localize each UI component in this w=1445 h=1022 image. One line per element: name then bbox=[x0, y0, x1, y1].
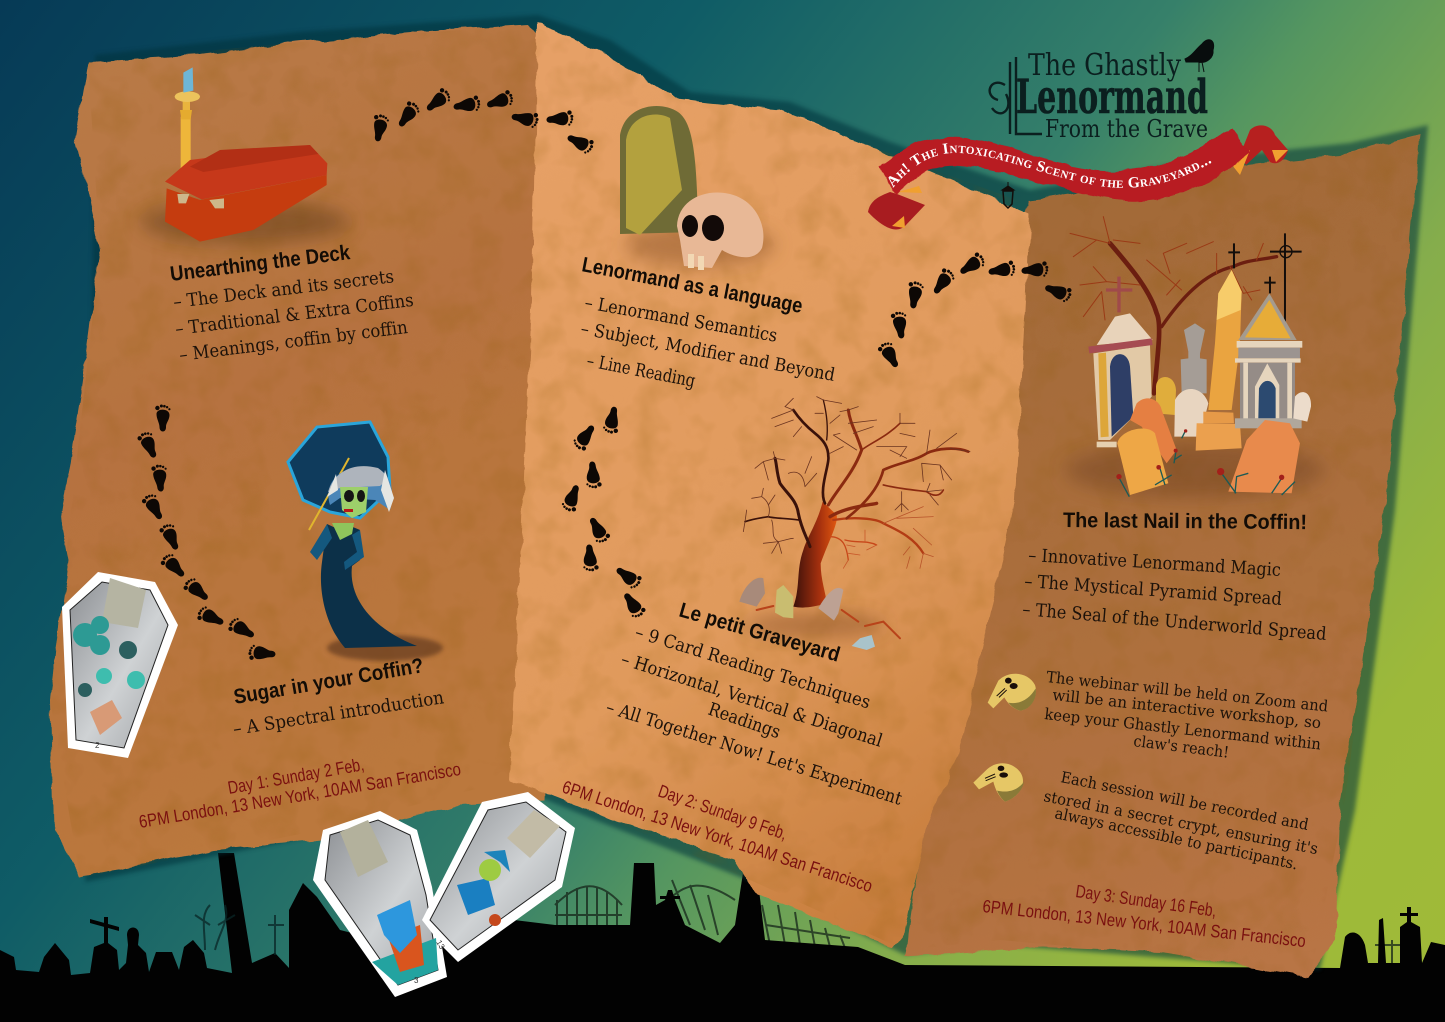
iron fences behind the graves bbox=[555, 880, 1400, 963]
illustration: mausoleums and graves bbox=[1070, 217, 1311, 497]
icon: skull two bbox=[973, 763, 1024, 802]
text: section 1 Unearthing the Deck: – The Deck and its secrets bbox=[172, 266, 395, 313]
head bbox=[340, 487, 368, 518]
ribbon body bbox=[878, 128, 1250, 201]
orange headstone back bbox=[1130, 398, 1177, 463]
ribbon right curl bbox=[1240, 125, 1288, 165]
red right branches bbox=[828, 410, 968, 560]
text: day 2 schedule: Day 2: Sunday 9 Feb, bbox=[656, 781, 790, 844]
logo: The Ghastly Lenormand From the Grave: The Ghastly bbox=[1028, 48, 1181, 83]
icon: lantern bbox=[1002, 182, 1014, 208]
text: day 1 schedule: 6PM London, 13 New York, 10AM San Francisco bbox=[137, 759, 462, 832]
card: coffin card 13 bbox=[422, 792, 575, 962]
left mausoleum bbox=[1088, 277, 1153, 447]
text: day 3 schedule: Day 3: Sunday 16 Feb, bbox=[1074, 881, 1218, 921]
text: section 2 Sugar in your Coffin bbox=[232, 654, 446, 740]
text: section 1 Unearthing the Deck bbox=[169, 241, 415, 366]
text: section 5 The last Nail in the Coffin: The last Nail in the Coffin! bbox=[1063, 509, 1307, 534]
text: webinar note: The webinar will be held on Zoom and bbox=[1046, 668, 1329, 716]
icon: skull one bbox=[988, 674, 1036, 711]
banner: red ribbon bbox=[868, 125, 1288, 230]
text: section 4 Le petit Graveyard: Le petit Graveyard bbox=[677, 599, 843, 667]
text: section 1 Unearthing the Deck: Unearthing the Deck bbox=[169, 241, 352, 286]
orange headstone front right bbox=[1228, 420, 1300, 493]
parasol bbox=[288, 422, 390, 518]
card: clover coffin card 2: 2 bbox=[95, 741, 100, 750]
tombstone bbox=[620, 106, 698, 234]
illustration: bare tree with graves bbox=[739, 397, 970, 650]
graveyard tree bbox=[1070, 217, 1277, 393]
text: section 4 Le petit Graveyard: Readings bbox=[705, 699, 783, 743]
text: section 3 Lenormand as a language: – Line Reading bbox=[585, 350, 697, 392]
text: section 3 Lenormand as a language: Lenormand as a language bbox=[580, 253, 804, 318]
graveyard silhouette bbox=[0, 853, 1445, 1022]
card: clover coffin card 2 bbox=[62, 572, 178, 758]
logo: The Ghastly Lenormand From the Grave: From the Grave bbox=[1045, 115, 1208, 143]
skeletal hands bbox=[177, 194, 224, 208]
crosses bbox=[1228, 233, 1302, 323]
trunk bbox=[793, 502, 837, 608]
text: section 4 Le petit Graveyard: – 9 Card Reading Techniques bbox=[633, 622, 873, 713]
text: recording note bbox=[1042, 768, 1320, 873]
right mausoleum bbox=[1235, 293, 1311, 428]
card: coffin card 3: 3 bbox=[414, 976, 419, 985]
logo: The Ghastly Lenormand From the Grave bbox=[990, 40, 1214, 143]
text: webinar note: keep your Ghastly Lenormand within bbox=[1044, 705, 1322, 753]
obelisk bbox=[1196, 270, 1242, 451]
text: recording note: always accessible to participants. bbox=[1053, 804, 1299, 873]
small gold headstone bbox=[1156, 377, 1176, 415]
text: day 2 schedule: 6PM London, 13 New York, 10AM San Francisco bbox=[560, 777, 875, 896]
footprints: middle trail bbox=[560, 405, 647, 620]
icon: ornamental L swirl bbox=[990, 57, 1042, 134]
dark left branches bbox=[745, 400, 828, 547]
text: section 4 Le petit Graveyard: – All Together Now! Let's Experiment bbox=[603, 697, 905, 810]
skull bbox=[677, 192, 763, 270]
twigs bbox=[743, 397, 970, 568]
text: section 4 Le petit Graveyard: – Horizontal, Vertical & Diagonal bbox=[618, 649, 885, 752]
footprints: left trail bbox=[136, 404, 276, 662]
dress bbox=[321, 524, 417, 648]
text: recording note: stored in a secret crypt, ensuring it's bbox=[1042, 787, 1320, 858]
text: section 5 The last Nail in the Coffin: – The Seal of the Underworld Spread bbox=[1022, 599, 1327, 645]
banner: red ribbon: Ah! The Intoxicating Scent of the Graveyard... bbox=[888, 143, 1212, 188]
white headstone bbox=[1174, 389, 1208, 437]
text: section 1 Unearthing the Deck: – Meanings, coffin by coffin bbox=[178, 317, 409, 366]
panel: left bbox=[50, 25, 570, 876]
text: recording note: Each session will be recorded and bbox=[1059, 768, 1310, 834]
shadow under coffin bbox=[140, 200, 350, 244]
text: webinar note: claw's reach! bbox=[1133, 732, 1230, 762]
text: section 4 Le petit Graveyard bbox=[603, 599, 905, 810]
text: day 3 schedule bbox=[982, 881, 1307, 951]
text: section 5 The last Nail in the Coffin: – Innovative Lenormand Magic bbox=[1028, 545, 1282, 581]
ribbon left curl bbox=[868, 192, 925, 229]
gravestones bbox=[739, 578, 875, 650]
urn monument bbox=[1181, 323, 1207, 393]
card: coffin card 13: 13 bbox=[434, 938, 447, 951]
coffin lid plate bbox=[190, 145, 318, 172]
illustration: coffin and candle bbox=[165, 67, 327, 242]
shadow under tree bbox=[745, 613, 885, 637]
coffin lid bbox=[165, 145, 327, 199]
logo: The Ghastly Lenormand From the Grave: Lenormand bbox=[1016, 70, 1208, 125]
hat and feathers bbox=[327, 466, 394, 512]
text: section 3 Lenormand as a language: – Subject, Modifier and Beyond bbox=[579, 318, 837, 386]
flowers bbox=[1116, 429, 1295, 497]
panel: right bbox=[905, 135, 1420, 977]
panel: middle bbox=[510, 22, 1030, 948]
bare chest bbox=[332, 523, 354, 540]
text: section 2 Sugar in your Coffin: – A Spectral introduction bbox=[232, 687, 446, 740]
orange headstone front left bbox=[1117, 428, 1168, 495]
card: coffin card 3 bbox=[313, 811, 447, 997]
text: section 5 The last Nail in the Coffin bbox=[1022, 509, 1327, 645]
illustration: skeleton lady with parasol bbox=[288, 422, 443, 661]
ribbon text bbox=[893, 142, 1242, 188]
arms bbox=[310, 524, 364, 570]
footprints: right trail bbox=[876, 251, 1073, 371]
text: day 1 schedule: Day 1: Sunday 2 Feb, bbox=[226, 754, 366, 798]
roots bbox=[757, 606, 900, 638]
footprints: top trail bbox=[370, 86, 596, 156]
illustration: tombstone and skull bbox=[620, 106, 775, 270]
text: section 1 Unearthing the Deck: – Traditional & Extra Coffins bbox=[174, 290, 415, 340]
icon: crow bbox=[1185, 40, 1214, 72]
text: section 2 Sugar in your Coffin: Sugar in your Coffin? bbox=[232, 654, 425, 709]
text: webinar note: will be an interactive workshop, so bbox=[1052, 686, 1322, 732]
text: section 3 Lenormand as a language bbox=[579, 253, 837, 392]
coffin body bbox=[165, 175, 327, 242]
text: section 3 Lenormand as a language: – Lenormand Semantics bbox=[583, 292, 779, 347]
candle and pillar bbox=[175, 67, 200, 169]
text: webinar note bbox=[1044, 668, 1329, 762]
text: day 3 schedule: 6PM London, 13 New York, 10AM San Francisco bbox=[982, 896, 1307, 951]
shadow under mausoleums bbox=[1065, 442, 1325, 498]
text: section 5 The last Nail in the Coffin: – The Mystical Pyramid Spread bbox=[1024, 571, 1282, 610]
